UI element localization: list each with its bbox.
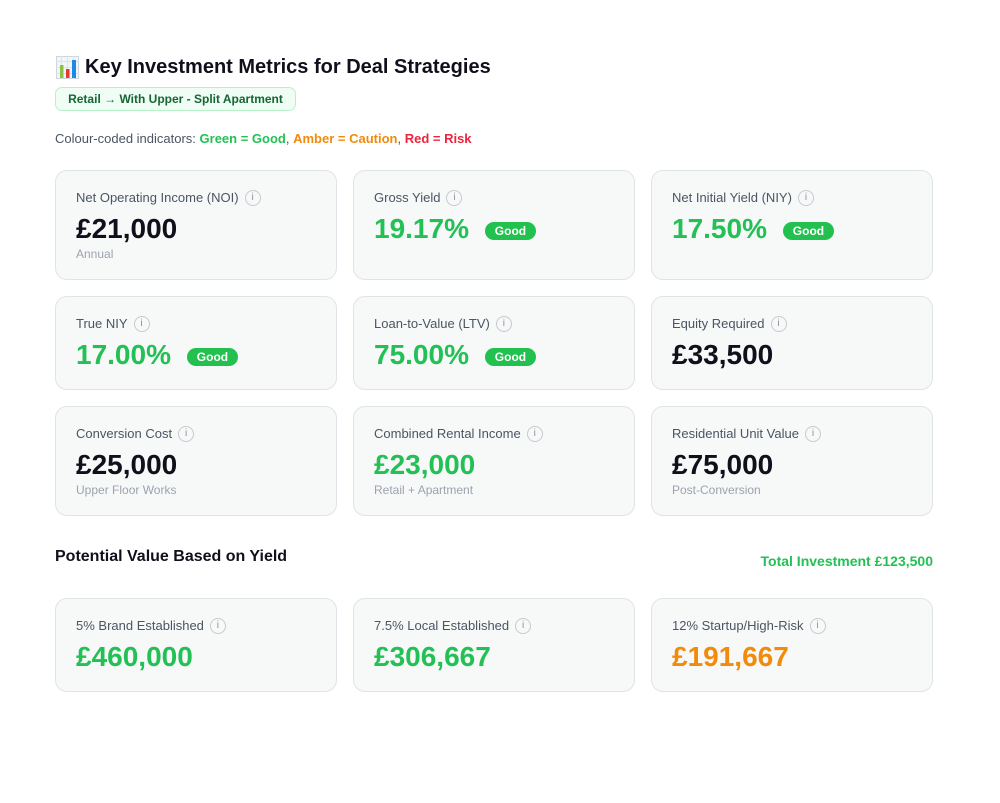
card: residential unit value: £75,000 [672, 449, 773, 480]
card: NIY: Good [793, 224, 824, 238]
card: combined rental income [353, 406, 635, 516]
card: LTV: i [503, 318, 505, 328]
card: true NIY: True NIY [76, 316, 128, 331]
card: residential unit value: Post-Conversion [672, 483, 761, 497]
card: 7.5% local established [353, 598, 635, 692]
card: NOI: i [251, 192, 254, 202]
card: gross yield [353, 170, 635, 280]
card: true NIY: Good [197, 350, 228, 364]
card: residential unit value [651, 406, 933, 516]
card: NIY: i [805, 192, 807, 202]
card: 12% startup/high-risk: 12% Startup/High-Risk [672, 618, 804, 633]
card: 7.5% local established: i [522, 620, 524, 630]
card: 7.5% local established: 7.5% Local Established [374, 618, 509, 633]
colour legend: Colour-coded indicators: Green = Good, Amber = Caution, Red = Risk [55, 131, 472, 146]
card: LTV: Good [495, 350, 526, 364]
card: combined rental income: £23,000 [374, 449, 475, 480]
card: 5% brand established: i [217, 620, 219, 630]
card: 7.5% local established: £306,667 [374, 641, 491, 672]
card: 12% startup/high-risk [651, 598, 933, 692]
card: LTV: Loan-to-Value (LTV) [374, 316, 490, 331]
card: combined rental income: Retail + Apartment [374, 483, 473, 497]
card: NOI: Net Operating Income (NOI) [76, 190, 239, 205]
card: LTV [353, 296, 635, 390]
card: true NIY: 17.00% [76, 339, 171, 370]
section heading: Potential Value Based on Yield [55, 548, 287, 565]
card: conversion cost: Upper Floor Works [76, 483, 176, 497]
total investment: Total Investment £123,500 [761, 553, 933, 569]
card: conversion cost: i [185, 428, 187, 438]
strategy tag [55, 87, 296, 111]
card: true NIY [55, 296, 337, 390]
card: equity required: £33,500 [672, 339, 773, 370]
card: NOI: Annual [76, 247, 113, 261]
card: gross yield: Gross Yield [374, 190, 440, 205]
card: NOI: £21,000 [76, 213, 177, 244]
card: conversion cost: Conversion Cost [76, 426, 172, 441]
title: Key Investment Metrics for Deal Strategies [85, 56, 491, 78]
card: combined rental income: i [534, 428, 536, 438]
card: 12% startup/high-risk: i [816, 620, 819, 630]
card: equity required: Equity Required [672, 316, 764, 331]
card: residential unit value: i [812, 428, 814, 438]
card: gross yield: 19.17% [374, 213, 469, 244]
card: residential unit value: Residential Unit Value [672, 426, 799, 441]
icon: bar chart [56, 56, 79, 79]
card: 5% brand established: 5% Brand Established [76, 618, 204, 633]
card: gross yield: i [453, 192, 456, 202]
card: conversion cost: £25,000 [76, 449, 177, 480]
card: 5% brand established [55, 598, 337, 692]
strategy tag: Retail → With Upper - Split Apartment [68, 92, 283, 106]
card: NOI [55, 170, 337, 280]
card: NIY: Net Initial Yield (NIY) [672, 190, 792, 205]
card: 12% startup/high-risk: £191,667 [672, 641, 789, 672]
card: 5% brand established: £460,000 [76, 641, 193, 672]
card: NIY [651, 170, 933, 280]
card: gross yield: Good [495, 224, 526, 238]
card: combined rental income: Combined Rental Income [374, 426, 521, 441]
card: conversion cost [55, 406, 337, 516]
card: NIY: 17.50% [672, 213, 767, 244]
card: LTV: 75.00% [374, 339, 469, 370]
card: equity required [651, 296, 933, 390]
card: equity required: i [777, 318, 780, 328]
card: true NIY: i [140, 318, 143, 328]
